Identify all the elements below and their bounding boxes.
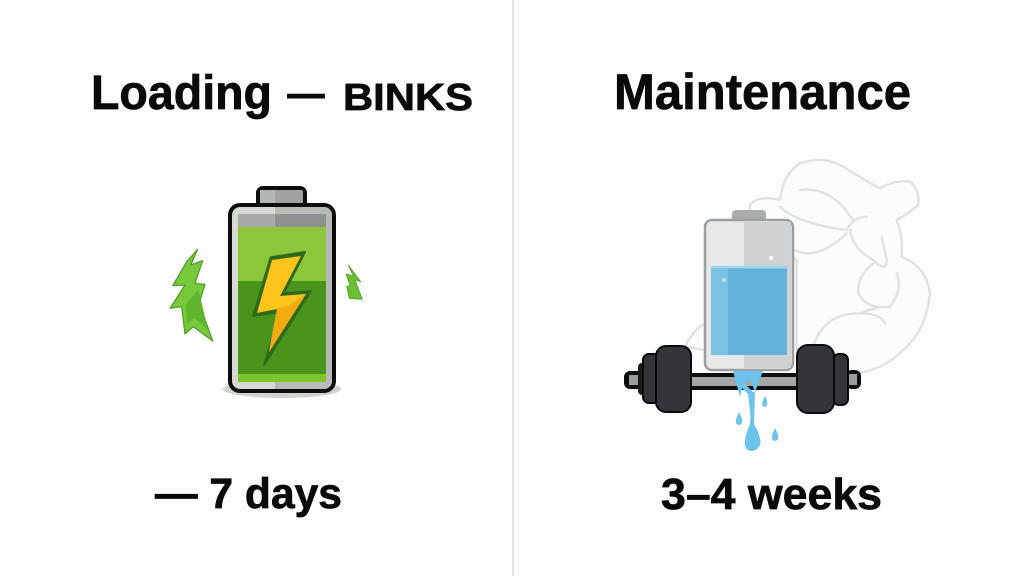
- water battery cap: [732, 210, 766, 222]
- heading: Loading: —: [287, 67, 325, 120]
- heading: Maintenance: Maintenance: [614, 64, 911, 120]
- label: loading duration: — 7 days: [155, 470, 342, 518]
- label: maintenance duration: 3–4 weeks: [661, 470, 882, 519]
- battery cap: [256, 186, 307, 210]
- heading: Loading: [91, 67, 473, 120]
- water battery body: [705, 220, 793, 370]
- icon: right green spark: [346, 265, 362, 299]
- leaking water drops: [733, 371, 778, 451]
- heading: Loading: Loading: [91, 67, 272, 120]
- dumbbell bar: [624, 370, 861, 390]
- icon: dumbbell with leaking water battery: [624, 210, 861, 451]
- heading: Loading: BINKS: [343, 77, 473, 119]
- battery body: [228, 203, 336, 393]
- icon: left green spark: [170, 249, 213, 341]
- icon: charging battery: [223, 186, 341, 398]
- central lightning bolt: [253, 252, 311, 365]
- icon: faint muscular arm: [685, 160, 930, 377]
- right weight plates: [797, 345, 848, 413]
- left weight plates: [638, 346, 691, 412]
- battery shadow: [223, 380, 341, 398]
